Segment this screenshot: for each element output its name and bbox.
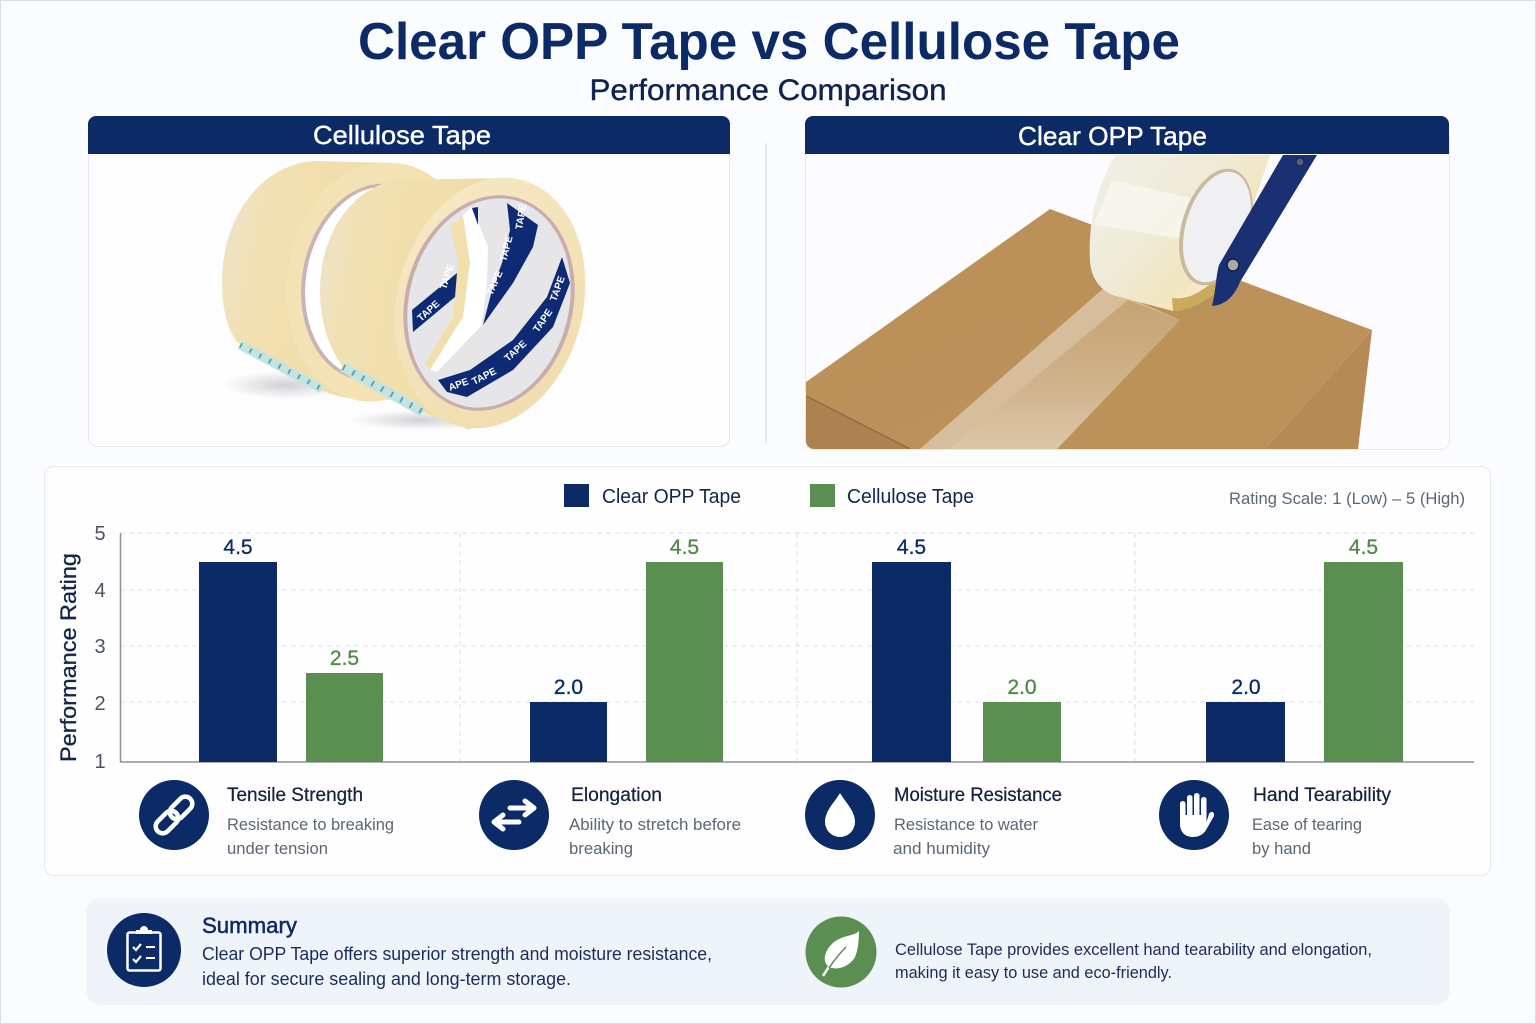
bars: hand tearability: 4.5 [1349, 536, 1378, 559]
bars: hand tearability [1206, 536, 1403, 762]
title: Clear OPP Tape vs Cellulose Tape [358, 13, 1180, 71]
header: clear OPP tape [805, 116, 1449, 154]
text: cellulose summary: Cellulose Tape provides excellent hand tearability and elongation, [895, 940, 1372, 959]
text: clear OPP summary: ideal for secure sealing and long-term storage. [202, 969, 571, 989]
metric: elongation: Elongation [571, 784, 662, 806]
metric: elongation: Ability to stretch before [569, 815, 741, 834]
summary background [86, 898, 1450, 1005]
icon: water drop [805, 780, 875, 850]
subtitle: Performance Comparison [590, 74, 946, 107]
bars: hand tearability: 2.0 [1231, 676, 1261, 699]
chart card [44, 466, 1490, 876]
y axis labels: 3 [94, 636, 106, 658]
bars: tensile strength: 4.5 [223, 536, 253, 559]
text: clear OPP summary [202, 944, 712, 989]
illustration: two tape rolls: TAPE [503, 338, 530, 364]
panel: cellulose tape [88, 116, 730, 449]
bars: elongation: 4.5 [670, 536, 699, 559]
bars: tensile strength: 2.5 [330, 647, 359, 670]
metric: moisture resistance: and humidity [893, 839, 991, 858]
illustration: two tape rolls: TAPE [485, 269, 506, 297]
header: cellulose tape [88, 116, 730, 154]
heading: summary: Summary [202, 913, 297, 938]
metric: hand tearability: Hand Tearability [1253, 784, 1391, 806]
illustration: two tape rolls: TAPE [438, 263, 457, 291]
bars: moisture resistance: 2.0 [1007, 676, 1037, 699]
legend: Clear OPP Tape [602, 486, 741, 508]
metric: moisture resistance: Moisture Resistance [894, 784, 1062, 806]
panel: summary [86, 898, 1450, 1005]
bars: elongation: 2.0 [554, 676, 583, 699]
legend [564, 484, 974, 508]
metric: hand tearability [1159, 780, 1391, 858]
y axis labels: 5 [94, 523, 106, 545]
metric: moisture resistance: Resistance to water [894, 815, 1038, 834]
illustration: two tape rolls: TAPE [470, 366, 499, 388]
image frame [806, 130, 1450, 450]
centre divider [765, 143, 767, 443]
illustration: dispenser applying tape to a box [806, 155, 1449, 449]
panel: performance chart [44, 466, 1490, 876]
metric: elongation [479, 780, 741, 858]
metric: hand tearability: Ease of tearing [1252, 815, 1362, 834]
icon: raised hand [1159, 780, 1229, 850]
metric: moisture resistance [805, 780, 1062, 858]
metric: tensile strength: Resistance to breaking [227, 815, 394, 834]
bars: moisture resistance [872, 536, 1061, 762]
y axis labels: 2 [94, 693, 106, 715]
icon: leaf [806, 916, 876, 988]
image frame [88, 130, 730, 446]
icon: chain link [139, 780, 209, 850]
icon: clipboard checklist [107, 913, 181, 987]
illustration: two tape rolls: TAPE [548, 275, 568, 303]
metric: elongation: breaking [569, 839, 633, 858]
y axis title: Performance Rating [56, 553, 81, 762]
panel: clear OPP tape [805, 116, 1450, 450]
bars: elongation [530, 536, 723, 762]
metric: tensile strength: under tension [227, 839, 328, 858]
metric: tensile strength [139, 780, 394, 858]
illustration: two tape rolls [222, 161, 586, 430]
header: cellulose tape: Cellulose Tape [313, 120, 491, 150]
legend: Cellulose Tape [847, 486, 974, 508]
y axis labels [94, 523, 106, 773]
rating scale note: Rating Scale: 1 (Low) – 5 (High) [1229, 489, 1465, 508]
illustration: two tape rolls: TAPE [531, 307, 556, 335]
illustration: two tape rolls: TAPE [514, 203, 530, 231]
bars: moisture resistance: 4.5 [897, 536, 926, 559]
text: cellulose summary [895, 940, 1372, 982]
y axis labels: 1 [94, 751, 106, 773]
icon: opposing arrows [479, 780, 549, 850]
metric: hand tearability: by hand [1252, 839, 1311, 858]
bar chart [56, 523, 1474, 773]
illustration: two tape rolls: APE [447, 376, 471, 394]
text: clear OPP summary: Clear OPP Tape offers superior strength and moisture resistance, [202, 944, 712, 964]
illustration: two tape rolls: TAPE [498, 235, 516, 263]
y axis labels: 4 [94, 580, 106, 602]
bars: tensile strength [199, 536, 383, 762]
header: clear OPP tape: Clear OPP Tape [1018, 121, 1207, 151]
text: cellulose summary: making it easy to use and eco-friendly. [895, 963, 1172, 982]
illustration: two tape rolls: TAPE [416, 298, 443, 324]
metric: tensile strength: Tensile Strength [227, 784, 363, 806]
